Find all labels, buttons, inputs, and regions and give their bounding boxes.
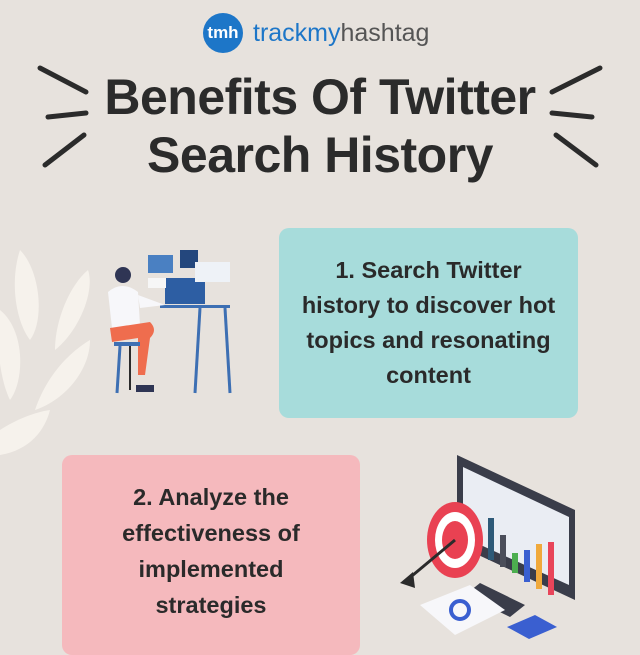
panel: step 2: effectiveness of [122,520,300,546]
decorative burst strokes [38,66,602,168]
panel: step 2: implemented [139,556,283,582]
illustration: monitor with target [400,455,575,639]
panel: step 1: history to discover hot [302,292,555,318]
title: Search History [147,127,493,183]
panel: step 2: 2. Analyze the [133,484,289,510]
panel: step 2 [62,455,360,655]
title: Benefits Of Twitter [104,69,536,125]
title [104,69,536,183]
icon: tmh circle [203,13,243,53]
logo [203,13,429,53]
illustration: person at desk [108,250,232,394]
panel: step 2: strategies [155,592,266,618]
panel: step 1: 1. Search Twitter [335,257,522,283]
decorative leaves [0,250,90,455]
icon: tmh circle: tmh [207,23,239,42]
panel: step 1: topics and resonating [306,327,551,353]
panel: step 1: content [386,362,471,388]
logo text: trackmyhashtag [253,19,429,47]
panel: step 1 [279,228,578,418]
